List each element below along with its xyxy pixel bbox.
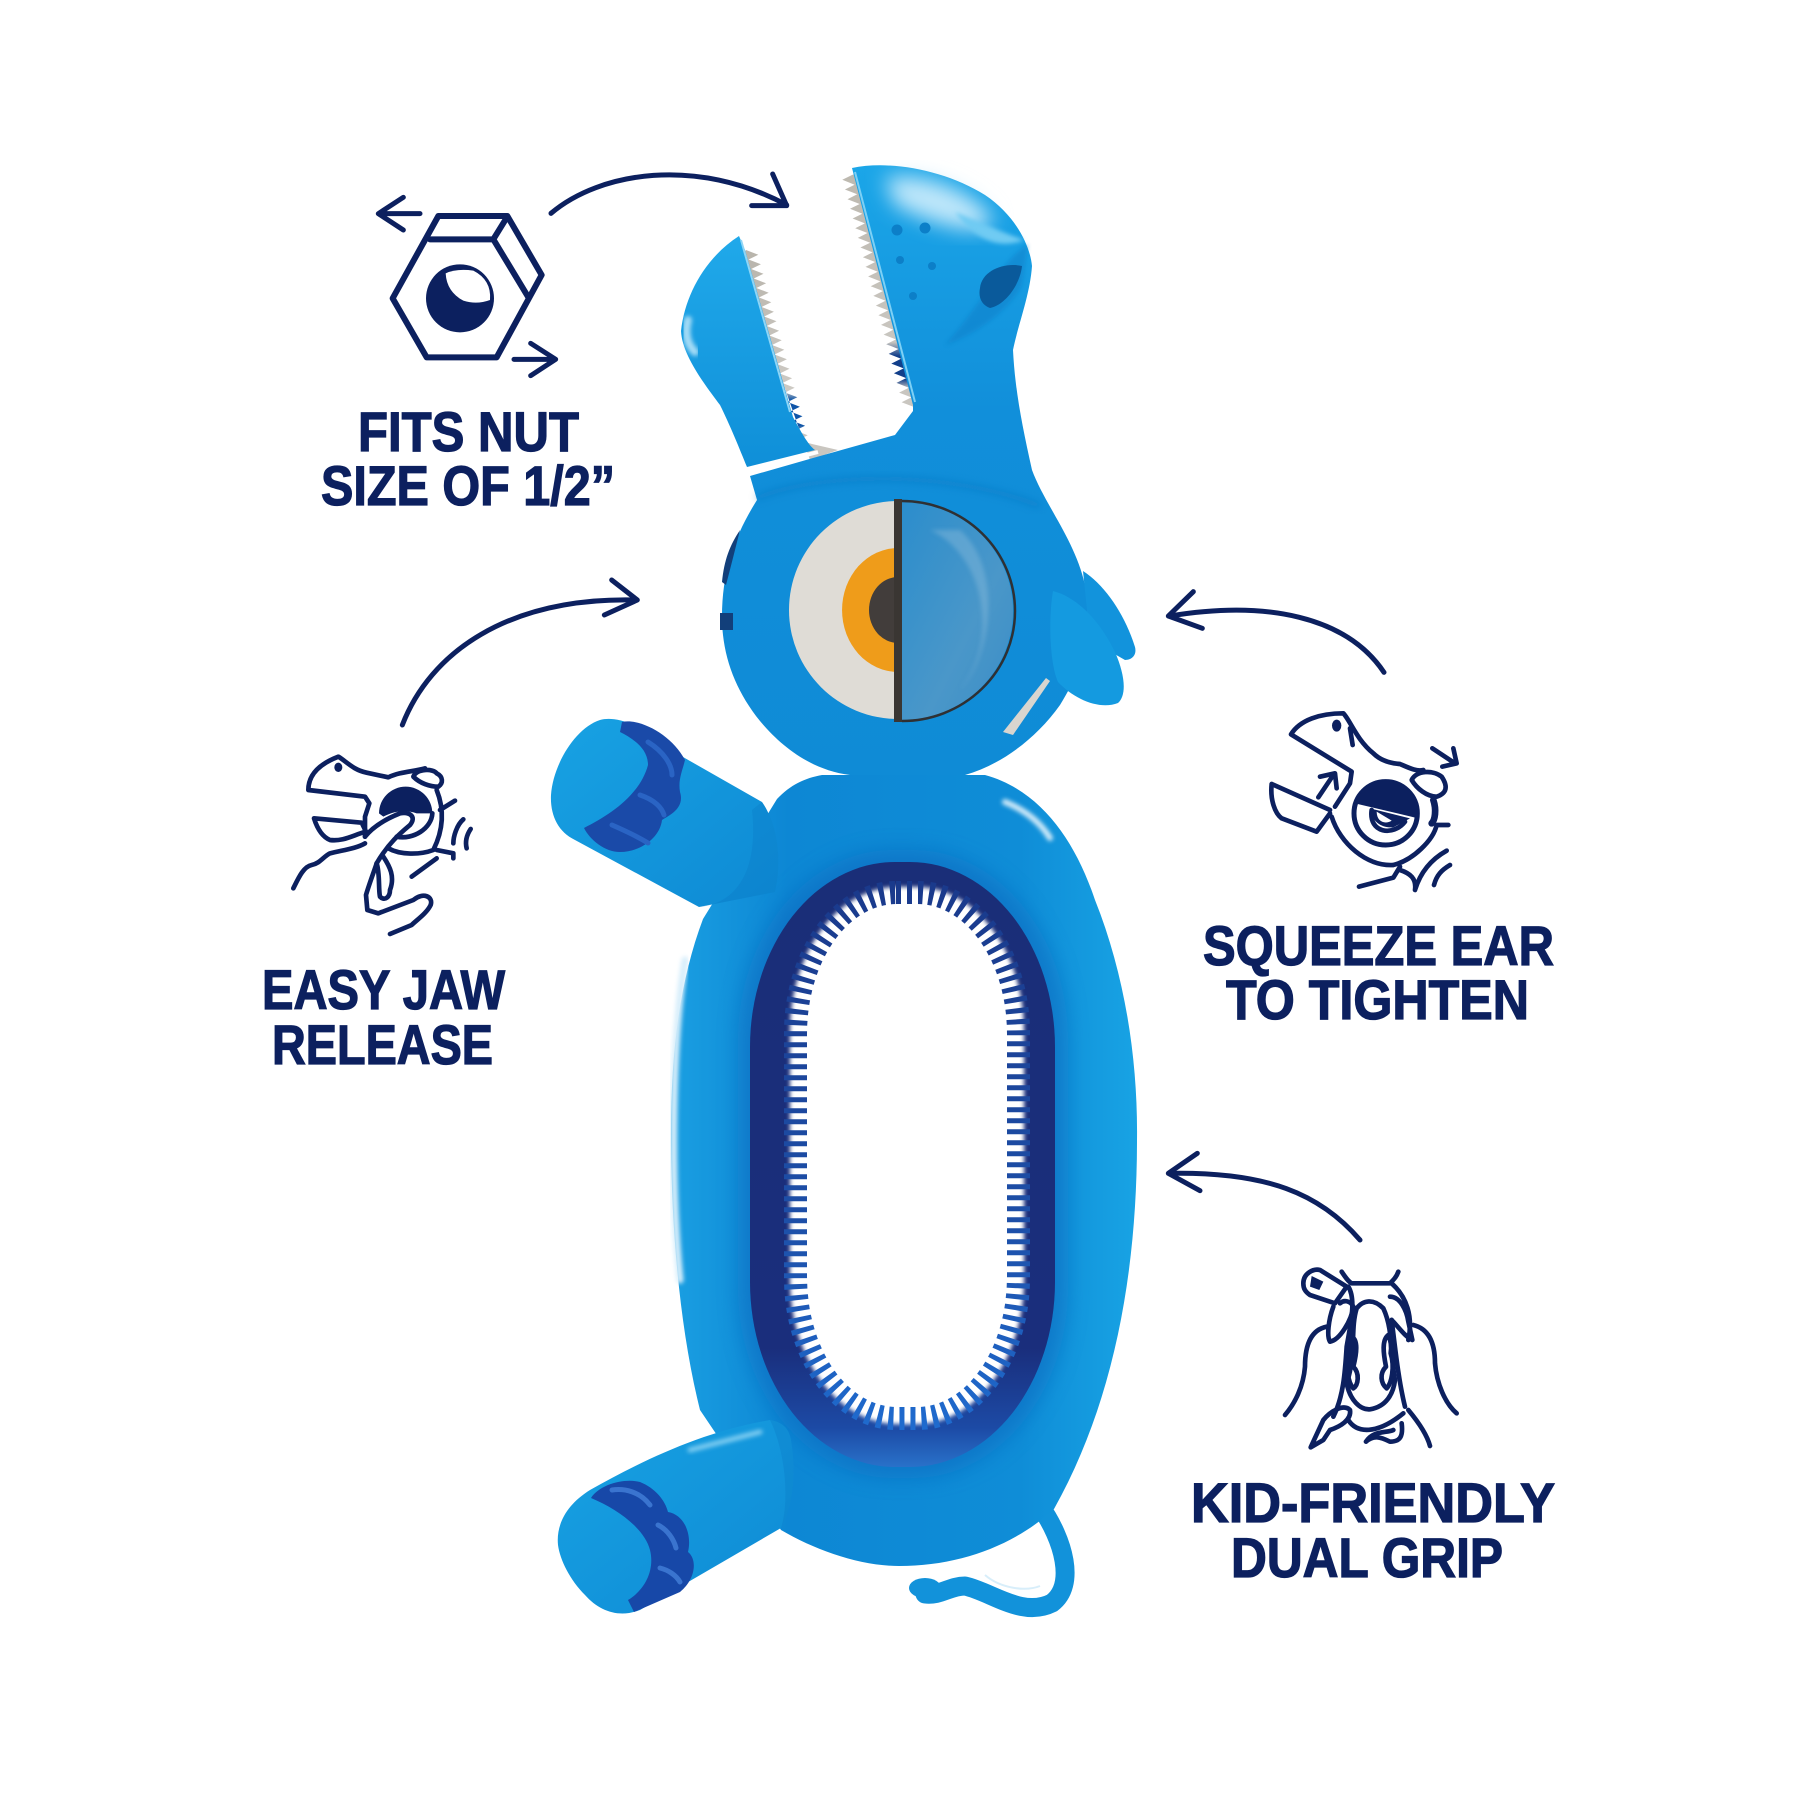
product: hippo-shaped wrench <box>551 165 1137 1614</box>
icon: two hands gripping <box>1285 1270 1457 1447</box>
callout: kid-friendly dual grip <box>1168 1153 1555 1589</box>
collar seam <box>748 452 818 470</box>
heading: squeeze ear: SQUEEZE EAR <box>1203 914 1554 977</box>
snout bumps <box>892 222 936 300</box>
upper jaw teeth <box>842 170 925 407</box>
upper arm <box>551 719 778 907</box>
heading: to tighten: TO TIGHTEN <box>1226 968 1529 1031</box>
callout: fits nut size <box>321 174 787 517</box>
icon: finger pressing button <box>293 757 471 934</box>
arrow: nut to jaw <box>551 174 787 213</box>
lower leg <box>558 1420 794 1614</box>
lower paw <box>591 1481 694 1612</box>
lock slit <box>1003 678 1050 735</box>
ears <box>1050 571 1135 705</box>
head with upper jaw <box>720 165 1088 775</box>
icon: hex nut <box>378 197 556 376</box>
heading: easy jaw: EASY JAW <box>262 958 505 1021</box>
ring body <box>671 775 1137 1566</box>
side notch <box>720 530 740 630</box>
tail <box>909 1506 1065 1608</box>
arrow: grip to body <box>1168 1153 1360 1240</box>
lower jaw teeth <box>740 250 838 460</box>
eye gauge <box>789 499 1015 722</box>
heading: size of: SIZE OF 1/2” <box>321 454 615 517</box>
lower jaw <box>681 236 815 467</box>
upper paw <box>584 721 685 852</box>
callout: squeeze ear to tighten <box>1168 592 1554 1031</box>
icon: squeezing ear <box>1271 713 1457 890</box>
heading: kid-friendly: KID-FRIENDLY <box>1191 1471 1555 1534</box>
callout: easy jaw release <box>262 580 637 1076</box>
heading: release: RELEASE <box>272 1013 493 1076</box>
heading: fits nut: FITS NUT <box>358 400 579 463</box>
ring bore with bristles <box>750 862 1055 1467</box>
nostril <box>979 265 1022 308</box>
arrow: release to head <box>402 580 637 725</box>
arrow: squeeze to ear <box>1168 592 1384 672</box>
heading: dual grip: DUAL GRIP <box>1231 1526 1503 1589</box>
